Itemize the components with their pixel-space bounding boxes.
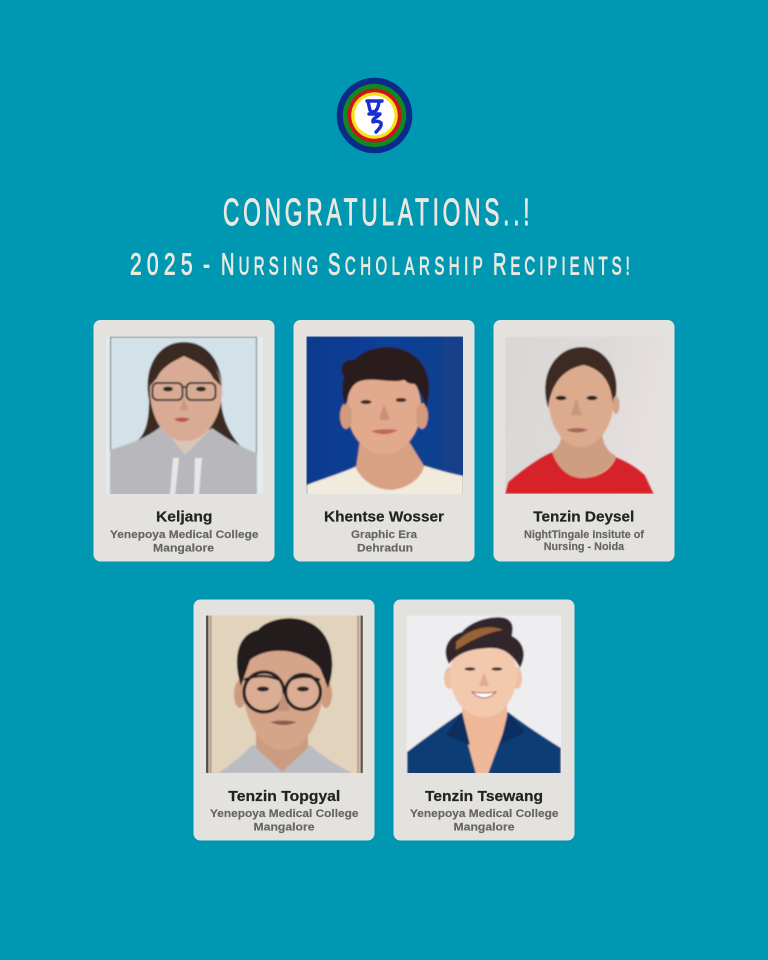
- college: Tenzin Tsewang: [410, 808, 558, 834]
- subtitle: NURSING: [221, 248, 318, 282]
- subtitle: -: [203, 246, 210, 282]
- name: Tenzin Topgyal: Tenzin Topgyal: [228, 788, 340, 805]
- subtitle: [130, 246, 630, 282]
- photo: Khentse Wosser portrait: [306, 336, 464, 495]
- college: Tenzin Deysel: [524, 529, 644, 553]
- name: Tenzin Deysel: Tenzin Deysel: [533, 508, 634, 526]
- name: Tenzin Tsewang: Tenzin Tsewang: [425, 788, 543, 805]
- panel: Khentse Wosser: [294, 320, 474, 562]
- college: Tenzin Tsewang: Mangalore: [454, 822, 514, 834]
- subtitle: 2025: [130, 246, 193, 282]
- panel: Tenzin Deysel: [494, 320, 674, 562]
- college: Tenzin Topgyal: Yenepoya Medical College: [210, 808, 358, 820]
- college: Tenzin Deysel: NightTingale Insitute of: [524, 529, 644, 541]
- panel: Keljang: [94, 320, 274, 562]
- subtitle: SCHOLARSHIP: [328, 248, 483, 282]
- photo: Keljang portrait: [106, 336, 264, 495]
- panel: Tenzin Topgyal: [194, 600, 374, 840]
- name: Khentse Wosser: Khentse Wosser: [324, 508, 444, 526]
- college: Keljang: Mangalore: [153, 542, 214, 554]
- college: Keljang: Yenepoya Medical College: [110, 529, 258, 541]
- name: Keljang: Keljang: [156, 508, 212, 526]
- photo: Tenzin Topgyal portrait: [206, 615, 364, 774]
- college: Khentse Wosser: Dehradun: [357, 542, 413, 554]
- college: Tenzin Topgyal: [210, 808, 358, 834]
- college: Khentse Wosser: Graphic Era: [351, 529, 418, 541]
- college: Tenzin Topgyal: Mangalore: [254, 822, 314, 834]
- logo: concentric emblem: [337, 78, 412, 153]
- title: CONGRATULATIONS..!: [223, 191, 530, 233]
- college: Keljang: [110, 529, 258, 554]
- college: Tenzin Deysel: Nursing - Noida: [544, 541, 625, 553]
- photo: Tenzin Deysel portrait: [505, 336, 663, 495]
- panel: Tenzin Tsewang: [394, 600, 574, 840]
- college: Tenzin Tsewang: Yenepoya Medical College: [410, 808, 558, 820]
- photo: Tenzin Tsewang portrait: [406, 615, 562, 774]
- college: Khentse Wosser: [351, 529, 418, 554]
- subtitle: RECIPIENTS!: [493, 248, 630, 282]
